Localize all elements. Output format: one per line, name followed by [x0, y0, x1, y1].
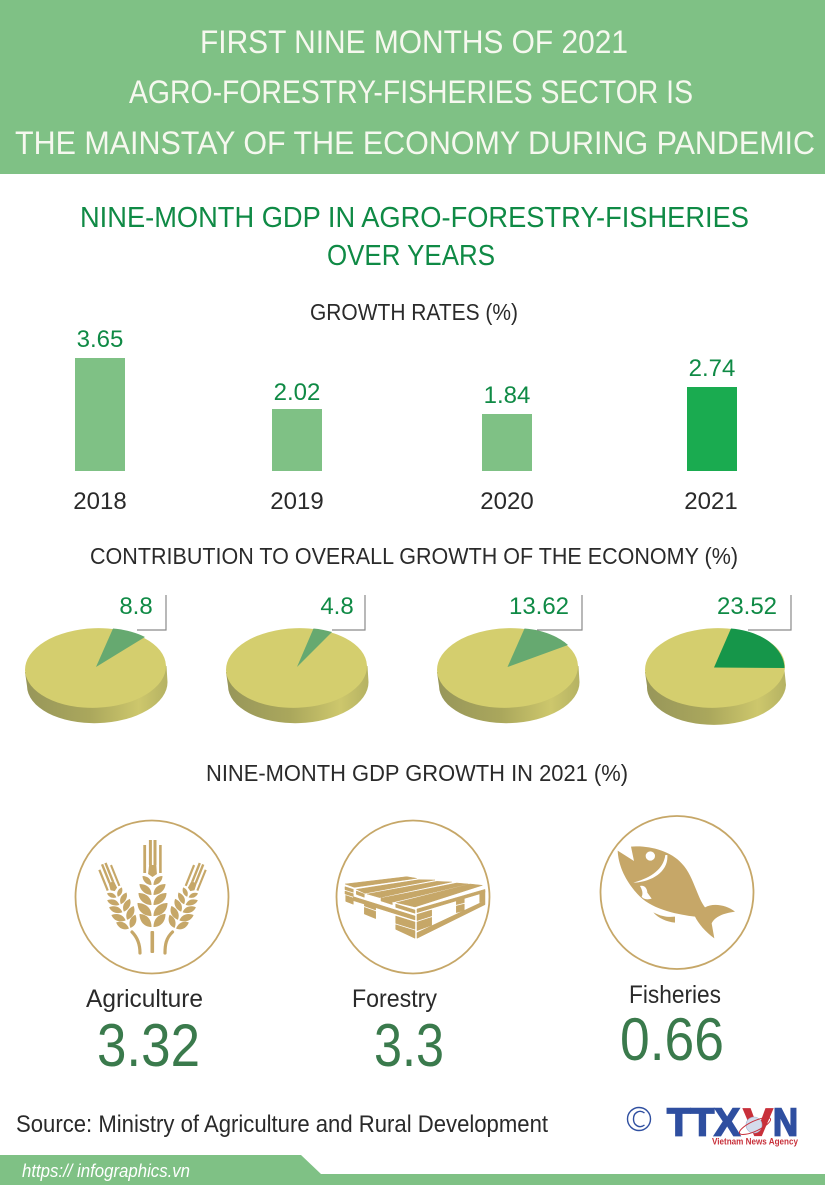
copyright symbol	[628, 1108, 650, 1130]
logo: TTXVN: V	[743, 1102, 773, 1144]
title line 2: AGRO-FORESTRY-FISHERIES SECTOR IS	[129, 74, 693, 110]
icon: wheat in circle	[76, 820, 228, 974]
source: Source: Ministry of Agriculture and Rural Development	[16, 1111, 548, 1138]
bar 2020	[480, 382, 534, 515]
logo: TTXVN: N	[773, 1102, 798, 1144]
bar 2020: 2020	[480, 488, 534, 515]
logo: TTXVN	[667, 1102, 799, 1148]
pie charts: contribution	[24, 593, 791, 725]
pie 2019: 4.8	[225, 593, 369, 723]
value: 3.32: 3.32	[97, 1012, 200, 1079]
GDP growth heading: NINE-MONTH GDP GROWTH IN 2021 (%)	[206, 760, 628, 786]
value: 3.3: 3.3	[374, 1012, 444, 1079]
bar 2020: 1.84	[484, 382, 530, 409]
bar 2019: 2.02	[274, 379, 320, 406]
bar 2018	[73, 326, 127, 515]
bar 2019	[270, 379, 324, 515]
bar 2019: 2019	[270, 488, 324, 515]
bar 2021: 2.74	[689, 355, 735, 382]
label: fisheries: Fisheries	[629, 981, 721, 1009]
icon: fish in circle	[600, 816, 754, 969]
agriculture block	[76, 820, 228, 1079]
pie 2021: 23.52	[644, 593, 791, 725]
section heading: NINE-MONTH GDP IN AGRO-FORESTRY-FISHERIES	[80, 202, 749, 234]
forestry block	[336, 820, 490, 1079]
growth rates heading: GROWTH RATES (%)	[310, 299, 518, 325]
header banner	[0, 0, 825, 174]
pie 2018: 8.8: 8.8	[119, 593, 153, 620]
pie 2019: 4.8: 4.8	[320, 593, 354, 620]
label: agriculture: Agriculture	[86, 985, 203, 1013]
title line 1: FIRST NINE MONTHS OF 2021	[200, 24, 628, 60]
section heading: OVER YEARS	[327, 240, 495, 272]
bar 2021: 2021	[684, 488, 738, 515]
pie 2018: 8.8	[24, 593, 168, 723]
bar 2021	[684, 355, 738, 515]
section heading	[80, 202, 749, 272]
footer url: https:// infographics.vn	[22, 1161, 190, 1181]
bar 2018: 2018	[73, 488, 127, 515]
pie 2021: 23.52: 23.52	[717, 593, 777, 620]
label: forestry: Forestry	[352, 985, 437, 1013]
logo: TTXVN: Vietnam News Agency	[712, 1136, 799, 1148]
footer band	[0, 1155, 825, 1185]
contribution heading: CONTRIBUTION TO OVERALL GROWTH OF THE ECONOMY (%)	[90, 543, 738, 569]
bar chart: growth rates	[73, 326, 738, 515]
bar 2018: 3.65	[77, 326, 123, 353]
icon: pallet in circle	[336, 820, 490, 974]
pie 2020: 13.62: 13.62	[509, 593, 569, 620]
pie 2020: 13.62	[436, 593, 582, 723]
value: 0.66: 0.66	[620, 1006, 724, 1073]
fisheries block	[600, 816, 754, 1073]
logo: TTXVN: TTX	[667, 1102, 740, 1144]
